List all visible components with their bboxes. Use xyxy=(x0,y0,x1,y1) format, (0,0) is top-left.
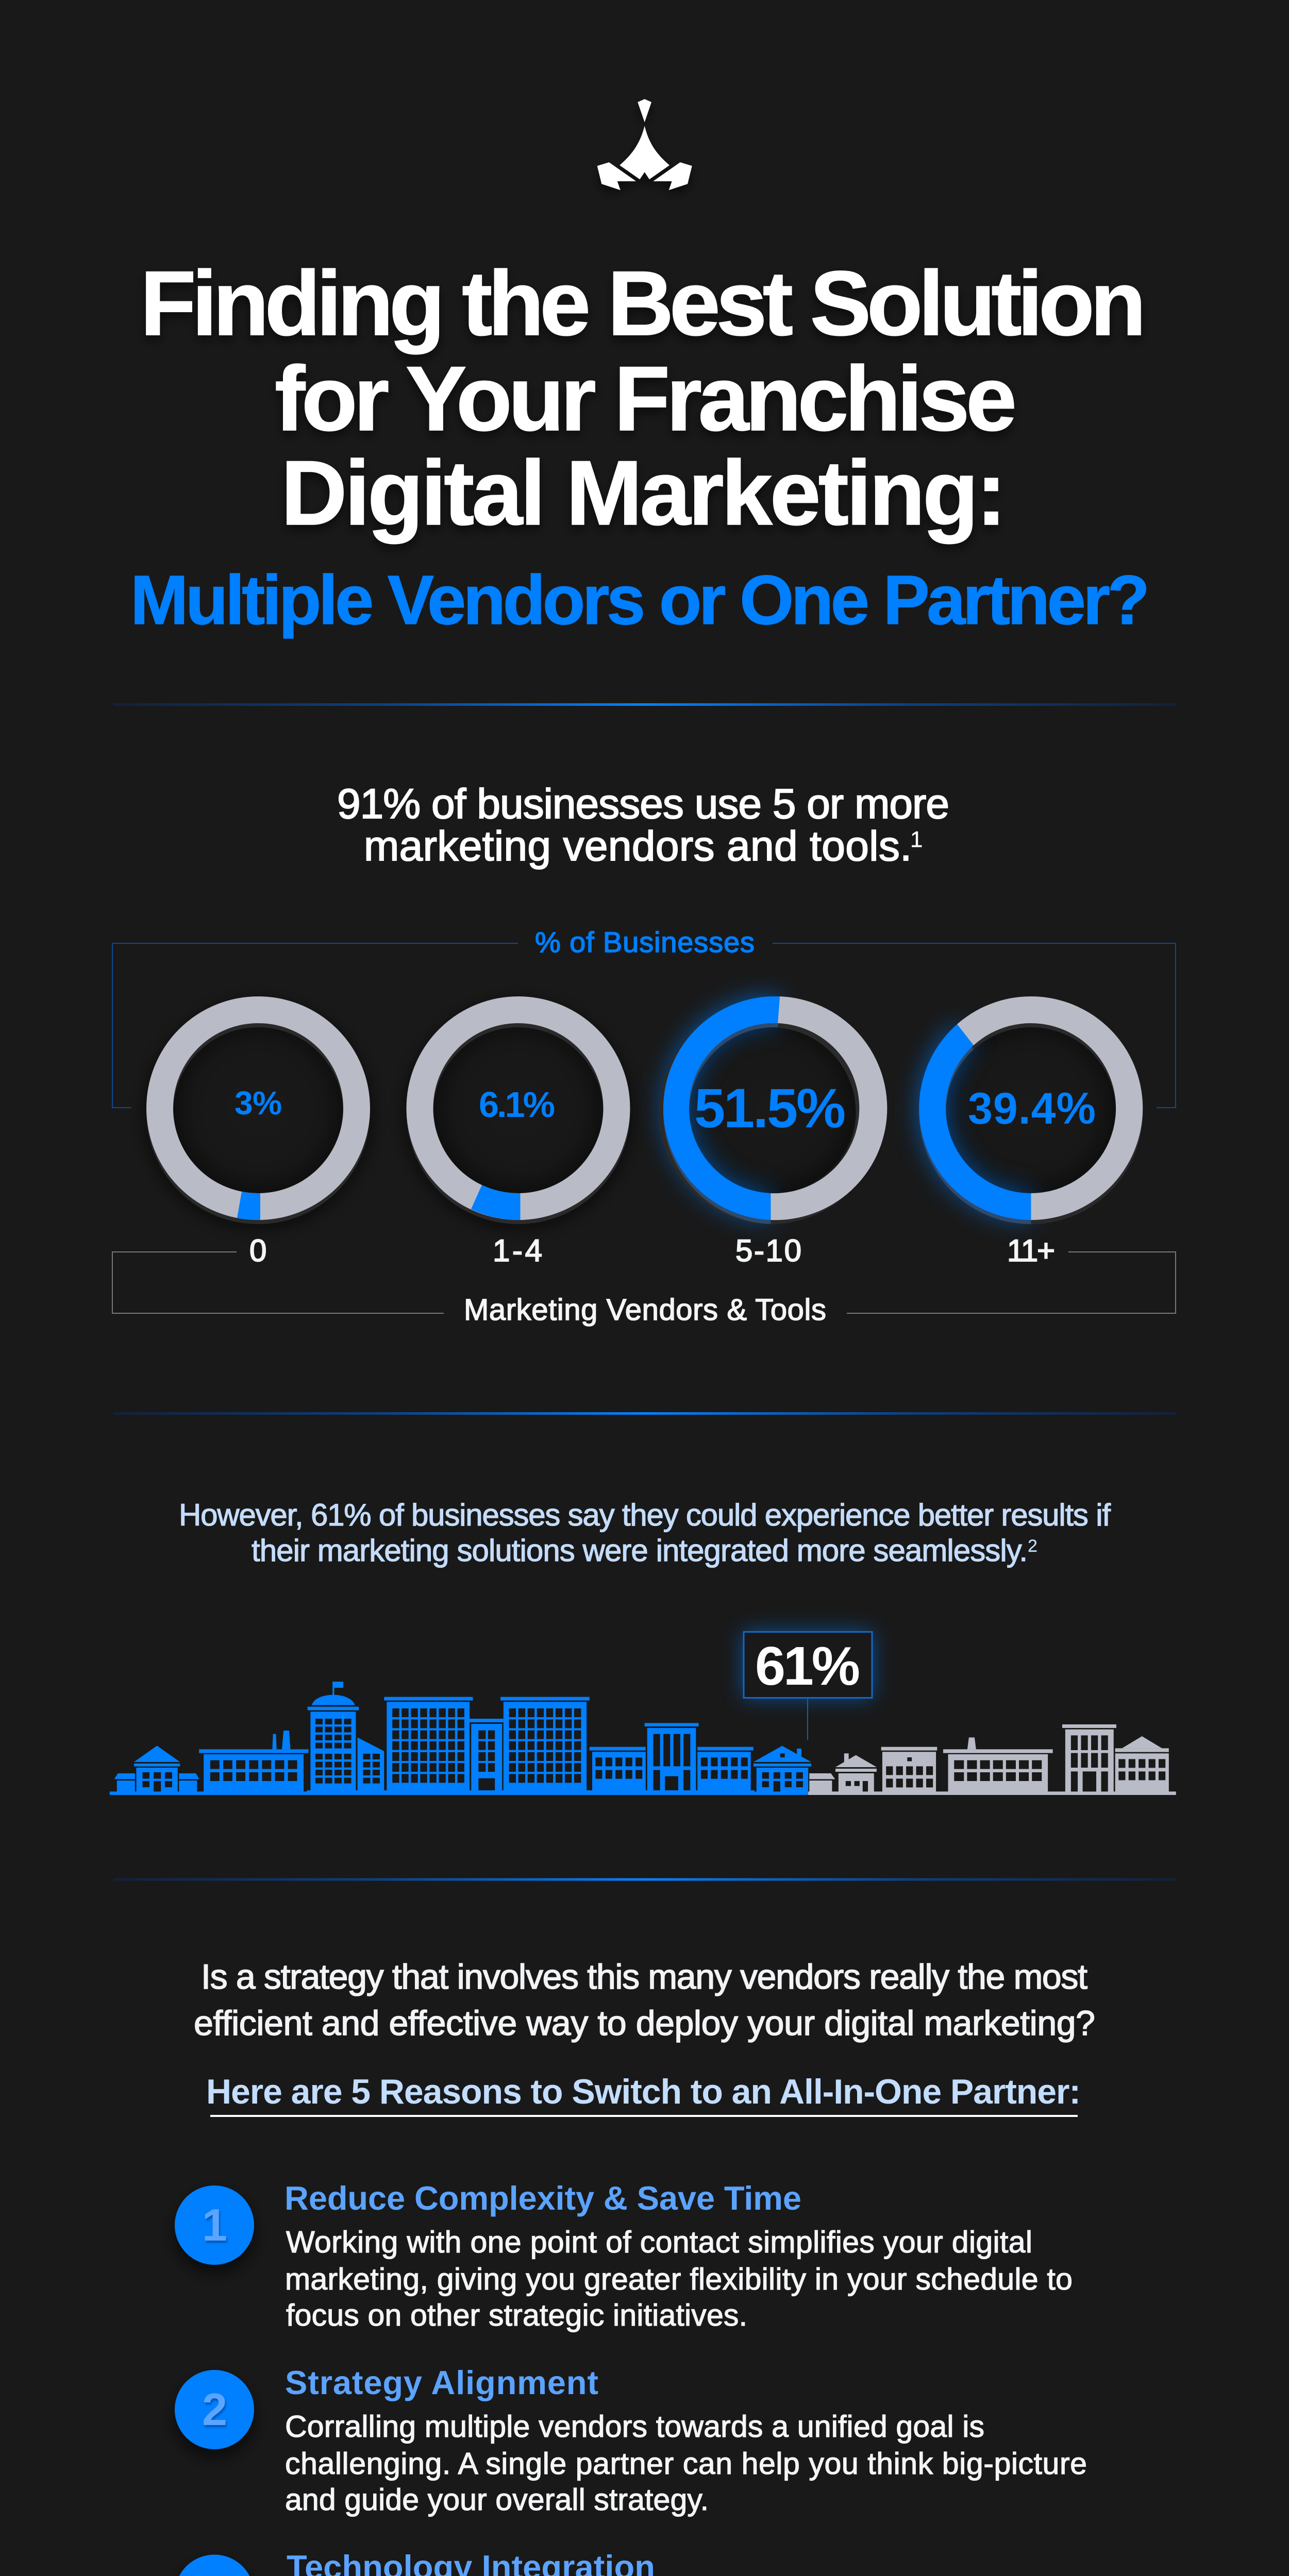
divider xyxy=(113,703,1176,706)
statistic heading: 91% of businesses use 5 or more xyxy=(337,781,949,827)
statistic heading xyxy=(337,781,949,870)
section heading: 5 reasons: Here are 5 Reasons to Switch to an All-In-One Partner: xyxy=(206,2072,1081,2111)
skyline: grey buildings xyxy=(808,1724,1176,1795)
number badge 2 xyxy=(175,2370,254,2449)
category labels xyxy=(249,1233,1055,1268)
chart: donut charts of vendors used xyxy=(112,926,1176,1327)
donut: 5-10 vendors, 51.5%: 51.5% xyxy=(694,1077,846,1139)
axis label: marketing vendors and tools: Marketing Vendors & Tools xyxy=(464,1293,826,1327)
category labels: 5-10 xyxy=(735,1233,801,1268)
statistic heading: marketing vendors and tools. xyxy=(364,823,912,870)
reason 2 xyxy=(175,2364,1087,2517)
donut: 1-4 vendors, 6.1% xyxy=(402,998,635,1231)
title: Digital Marketing: xyxy=(281,442,1007,544)
skyline: blue buildings right xyxy=(590,1723,811,1795)
question text xyxy=(194,1957,1095,2043)
donut: 1-4 vendors, 6.1%: 6.1% xyxy=(479,1084,555,1125)
question text: efficient and effective way to deploy your digital marketing? xyxy=(194,2004,1095,2043)
divider xyxy=(113,1412,1176,1415)
question text: Is a strategy that involves this many vendors really the most xyxy=(201,1957,1087,1996)
statistic text: integration: their marketing solutions were integrated more seamlessly. xyxy=(252,1533,1028,1568)
heading: strategy alignment: Strategy Alignment xyxy=(285,2364,598,2401)
body text: marketing, giving you greater flexibility in your schedule to xyxy=(285,2262,1073,2296)
category labels: 1-4 xyxy=(493,1233,542,1268)
heading: reduce complexity: Reduce Complexity & Save Time xyxy=(284,2179,801,2217)
donut: 11+ vendors, 39.4%: 39.4% xyxy=(968,1084,1096,1133)
body text: Corralling multiple vendors towards a unified goal is xyxy=(285,2410,984,2444)
axis label: % of businesses xyxy=(112,926,1176,1108)
reason 1 xyxy=(175,2179,1073,2332)
body text: Working with one point of contact simplifies your digital xyxy=(286,2225,1032,2259)
number badge 1 xyxy=(175,2185,254,2265)
illustration: city skyline 61 percent highlighted xyxy=(110,1632,1176,1795)
reason 3 xyxy=(175,2548,1089,2576)
callout: 61% xyxy=(743,1632,872,1740)
category labels: 0 xyxy=(249,1233,266,1268)
donut: 0 vendors, 3%: 3% xyxy=(235,1084,282,1122)
donut: 0 vendors, 3% xyxy=(142,998,375,1231)
title: Finding the Best Solution xyxy=(140,252,1146,354)
title: for Your Franchise xyxy=(275,347,1017,450)
skyline: blue buildings left xyxy=(110,1682,618,1795)
title xyxy=(140,252,1146,544)
body text: challenging. A single partner can help you think big-picture xyxy=(285,2447,1087,2481)
statistic text: integration: 2 xyxy=(1028,1536,1037,1556)
subtitle: Multiple Vendors or One Partner? xyxy=(130,561,1150,639)
number badge 2: 2 xyxy=(202,2384,227,2435)
statistic heading: 1 xyxy=(910,827,923,852)
body text: and guide your overall strategy. xyxy=(285,2483,709,2517)
axis label: % of businesses: % of Businesses xyxy=(535,926,755,958)
category labels: 11+ xyxy=(1007,1233,1055,1268)
donut: 11+ vendors, 39.4% xyxy=(919,996,1143,1224)
number badge 3 xyxy=(175,2554,254,2576)
number badge 1: 1 xyxy=(202,2199,227,2250)
axis label: marketing vendors and tools xyxy=(112,1252,1176,1327)
body text xyxy=(285,2410,1087,2517)
body text xyxy=(285,2225,1073,2332)
callout: 61%: 61% xyxy=(755,1636,860,1697)
statistic text: integration xyxy=(179,1498,1111,1568)
statistic text: integration: However, 61% of businesses say they could experience better results if xyxy=(179,1498,1111,1532)
donut: 5-10 vendors, 51.5% xyxy=(663,996,887,1224)
icon: scorpion logo mark xyxy=(597,99,692,190)
divider xyxy=(113,1878,1176,1880)
body text: focus on other strategic initiatives. xyxy=(286,2298,747,2332)
